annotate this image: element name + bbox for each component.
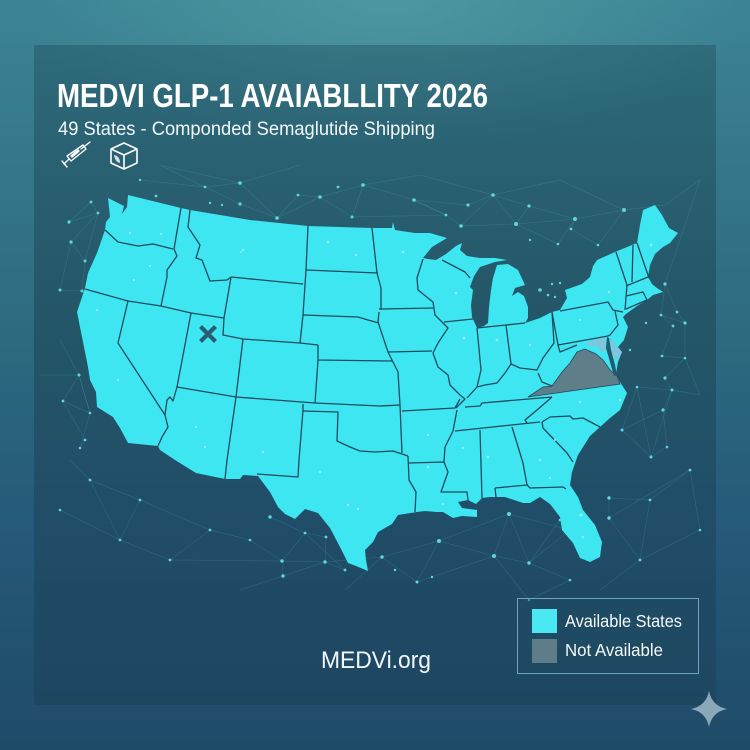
legend box: [518, 598, 698, 674]
Chesapeake Bay: [606, 337, 617, 376]
map: United States: [77, 195, 678, 571]
state borders: [85, 208, 649, 512]
legend: [518, 598, 698, 674]
land silhouette: [77, 195, 678, 571]
title: MEDVI GLP-1 AVAIABLLITY 2026: [57, 77, 488, 114]
network pattern: [40, 165, 701, 601]
label: not available: Not Available: [565, 640, 663, 660]
state: Maryland and Delaware tint: [586, 337, 622, 361]
swatch: available: [532, 609, 557, 633]
icon: box: [111, 143, 137, 169]
swatch: not available: [532, 639, 557, 663]
icon: sparkle: [691, 691, 727, 727]
icon: syringe: [62, 142, 90, 167]
label: available: Available States: [565, 611, 682, 631]
map highlights: [96, 232, 652, 538]
subtitle: 49 States - Componded Semaglutide Shipping: [58, 118, 435, 140]
website label: MEDVi.org: [321, 647, 431, 674]
state: Virginia not available: [528, 349, 620, 397]
marker: X: [202, 328, 214, 340]
